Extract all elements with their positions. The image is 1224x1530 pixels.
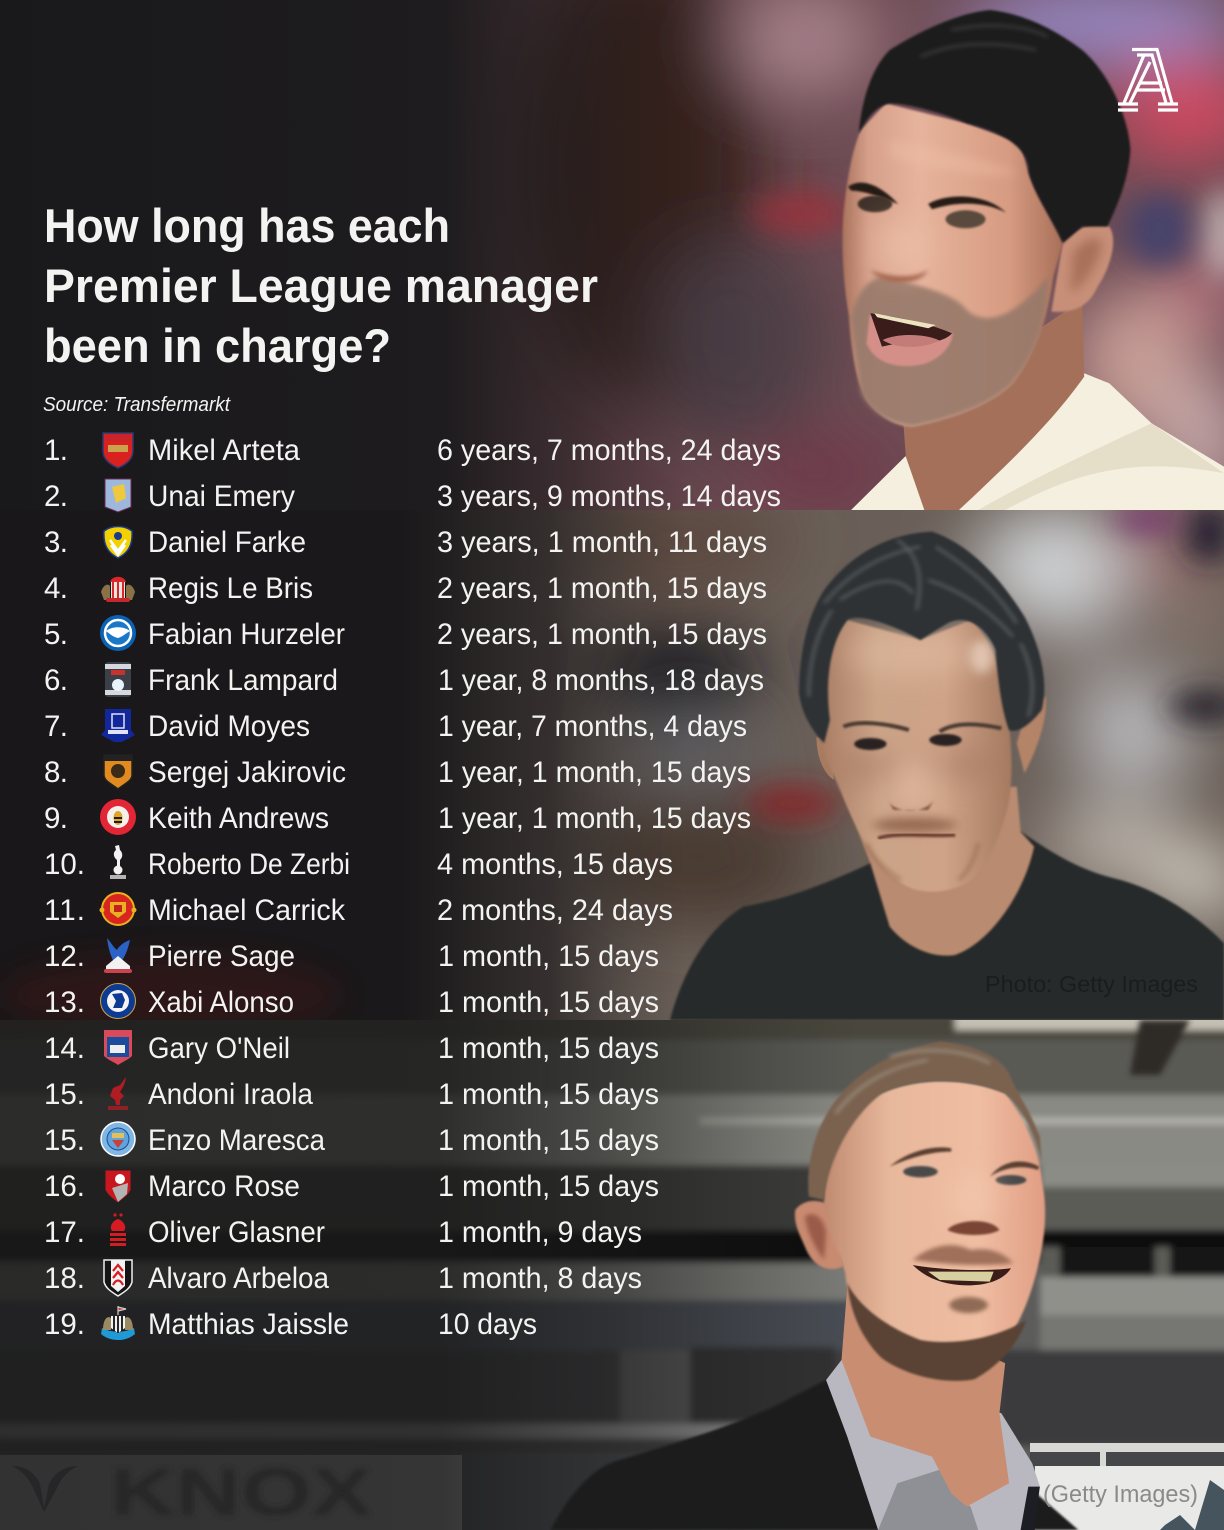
row 7: 7.	[44, 710, 68, 743]
row 1	[44, 433, 781, 468]
row 15	[44, 1077, 659, 1111]
crest: Arsenal	[103, 433, 133, 468]
row 9: Keith Andrews	[148, 802, 329, 835]
crest: Liverpool	[108, 1077, 128, 1110]
row 8	[44, 755, 751, 789]
row 6	[44, 662, 764, 697]
row 7	[44, 709, 747, 743]
background sign: KNOX: KNOX	[110, 1455, 372, 1530]
crest: Leeds United	[104, 526, 132, 558]
crest: Hull City	[104, 755, 132, 789]
row 20: 19.	[44, 1308, 85, 1341]
row 5	[44, 615, 767, 651]
row 18: Oliver Glasner	[148, 1216, 325, 1249]
row 4: 2 years, 1 month, 15 days	[437, 572, 767, 605]
row 2: 3 years, 9 months, 14 days	[437, 480, 781, 513]
row 6: Frank Lampard	[148, 664, 338, 697]
row 1: Mikel Arteta	[148, 434, 301, 467]
row 11: 2 months, 24 days	[437, 894, 673, 927]
row 19: 1 month, 8 days	[438, 1262, 642, 1295]
row 17: 16.	[44, 1170, 85, 1203]
row 4	[44, 572, 767, 605]
crest: Tottenham	[110, 845, 126, 879]
manager table	[44, 433, 781, 1341]
crest: Brentford	[100, 799, 136, 835]
crest: Aston Villa	[105, 479, 131, 512]
row 6: 1 year, 8 months, 18 days	[438, 664, 764, 697]
row 12	[44, 938, 659, 973]
row 1: 6 years, 7 months, 24 days	[437, 434, 781, 467]
row 11: 11.	[44, 894, 85, 927]
row 11: Michael Carrick	[148, 894, 345, 927]
row 10: 4 months, 15 days	[437, 848, 673, 881]
crest: Crystal Palace	[104, 938, 132, 973]
title	[44, 199, 598, 372]
row 16: 15.	[44, 1124, 85, 1157]
row 14	[44, 1030, 659, 1065]
crest: Everton	[101, 709, 135, 742]
row 19: 18.	[44, 1262, 85, 1295]
row 13: 13.	[44, 986, 85, 1019]
row 16: Enzo Maresca	[148, 1124, 326, 1157]
row 14: Gary O'Neil	[148, 1032, 290, 1065]
row 4: 4.	[44, 572, 68, 605]
row 12: 1 month, 15 days	[438, 940, 659, 973]
crest: Sunderland	[101, 577, 135, 602]
row 17: 1 month, 15 days	[438, 1170, 659, 1203]
title: Premier League manager	[44, 259, 598, 312]
row 10	[44, 845, 673, 881]
row 20	[44, 1306, 537, 1341]
crest: Brighton	[100, 615, 136, 651]
row 11	[44, 893, 673, 927]
icon: ram logo on sign	[12, 1466, 78, 1512]
crest: Nottingham Forest	[110, 1213, 126, 1246]
row 9: 1 year, 1 month, 15 days	[438, 802, 751, 835]
row 8: Sergej Jakirovic	[148, 756, 346, 789]
row 4: Regis Le Bris	[148, 572, 313, 605]
row 18	[44, 1213, 642, 1249]
row 2	[44, 479, 781, 513]
crest: Manchester United	[100, 893, 136, 925]
row 16: 1 month, 15 days	[438, 1124, 659, 1157]
row 19: Alvaro Arbeloa	[148, 1262, 330, 1295]
row 5: 5.	[44, 618, 68, 651]
credit: Getty Images: (Getty Images)	[1043, 1481, 1198, 1508]
title: How long has each	[44, 199, 450, 252]
crest: Fulham	[104, 1260, 132, 1296]
crest: Ipswich Town	[104, 1030, 132, 1065]
row 2: Unai Emery	[148, 480, 295, 513]
row 9: 9.	[44, 802, 68, 835]
logo: The Athletic	[1118, 50, 1178, 110]
photo: Matthias Jaissle	[551, 1042, 1078, 1530]
row 16	[44, 1122, 659, 1157]
panel: Jaissle stadium photo background	[0, 1010, 1224, 1530]
row 17: Marco Rose	[148, 1170, 300, 1203]
row 14: 1 month, 15 days	[438, 1032, 659, 1065]
row 7: 1 year, 7 months, 4 days	[438, 710, 747, 743]
row 3	[44, 526, 767, 559]
row 17	[44, 1170, 659, 1203]
photo: Mikel Arteta	[842, 10, 1224, 510]
row 5: 2 years, 1 month, 15 days	[437, 618, 767, 651]
crest: Manchester City	[101, 1122, 135, 1156]
row 18: 17.	[44, 1216, 85, 1249]
row 20: Matthias Jaissle	[148, 1308, 349, 1341]
row 13	[44, 984, 659, 1019]
crest: Newcastle United	[101, 1306, 135, 1340]
row 13: 1 month, 15 days	[438, 986, 659, 1019]
panel: Arteta photo background	[458, 0, 1224, 510]
row 3: 3 years, 1 month, 11 days	[437, 526, 767, 559]
row 5: Fabian Hurzeler	[148, 618, 345, 651]
photo: Unai Emery	[670, 532, 1224, 1020]
row 10: 10.	[44, 848, 85, 881]
row 20: 10 days	[438, 1308, 537, 1341]
source note: Source: Transfermarkt	[43, 394, 231, 416]
row 8: 8.	[44, 756, 68, 789]
crest: Bournemouth	[105, 1170, 131, 1203]
row 13: Xabi Alonso	[148, 986, 294, 1019]
row 19	[44, 1260, 642, 1296]
crest: Coventry City	[105, 662, 131, 697]
row 9	[44, 799, 751, 835]
title: been in charge?	[44, 319, 391, 372]
row 7: David Moyes	[148, 710, 310, 743]
row 15: 1 month, 15 days	[438, 1078, 659, 1111]
row 2: 2.	[44, 480, 68, 513]
row 3: 3.	[44, 526, 68, 559]
crest: Chelsea	[100, 984, 136, 1018]
row 10: Roberto De Zerbi	[148, 848, 350, 881]
row 18: 1 month, 9 days	[438, 1216, 642, 1249]
row 12: 12.	[44, 940, 85, 973]
row 1: 1.	[44, 434, 68, 467]
row 8: 1 year, 1 month, 15 days	[438, 756, 751, 789]
row 15: 15.	[44, 1078, 85, 1111]
panel: Emery photo background	[0, 483, 1224, 1035]
row 14: 14.	[44, 1032, 85, 1065]
row 3: Daniel Farke	[148, 526, 306, 559]
row 12: Pierre Sage	[148, 940, 295, 973]
row 6: 6.	[44, 664, 68, 697]
credit: Photo Getty Images: Photo: Getty Images	[985, 971, 1198, 997]
row 15: Andoni Iraola	[148, 1078, 314, 1111]
